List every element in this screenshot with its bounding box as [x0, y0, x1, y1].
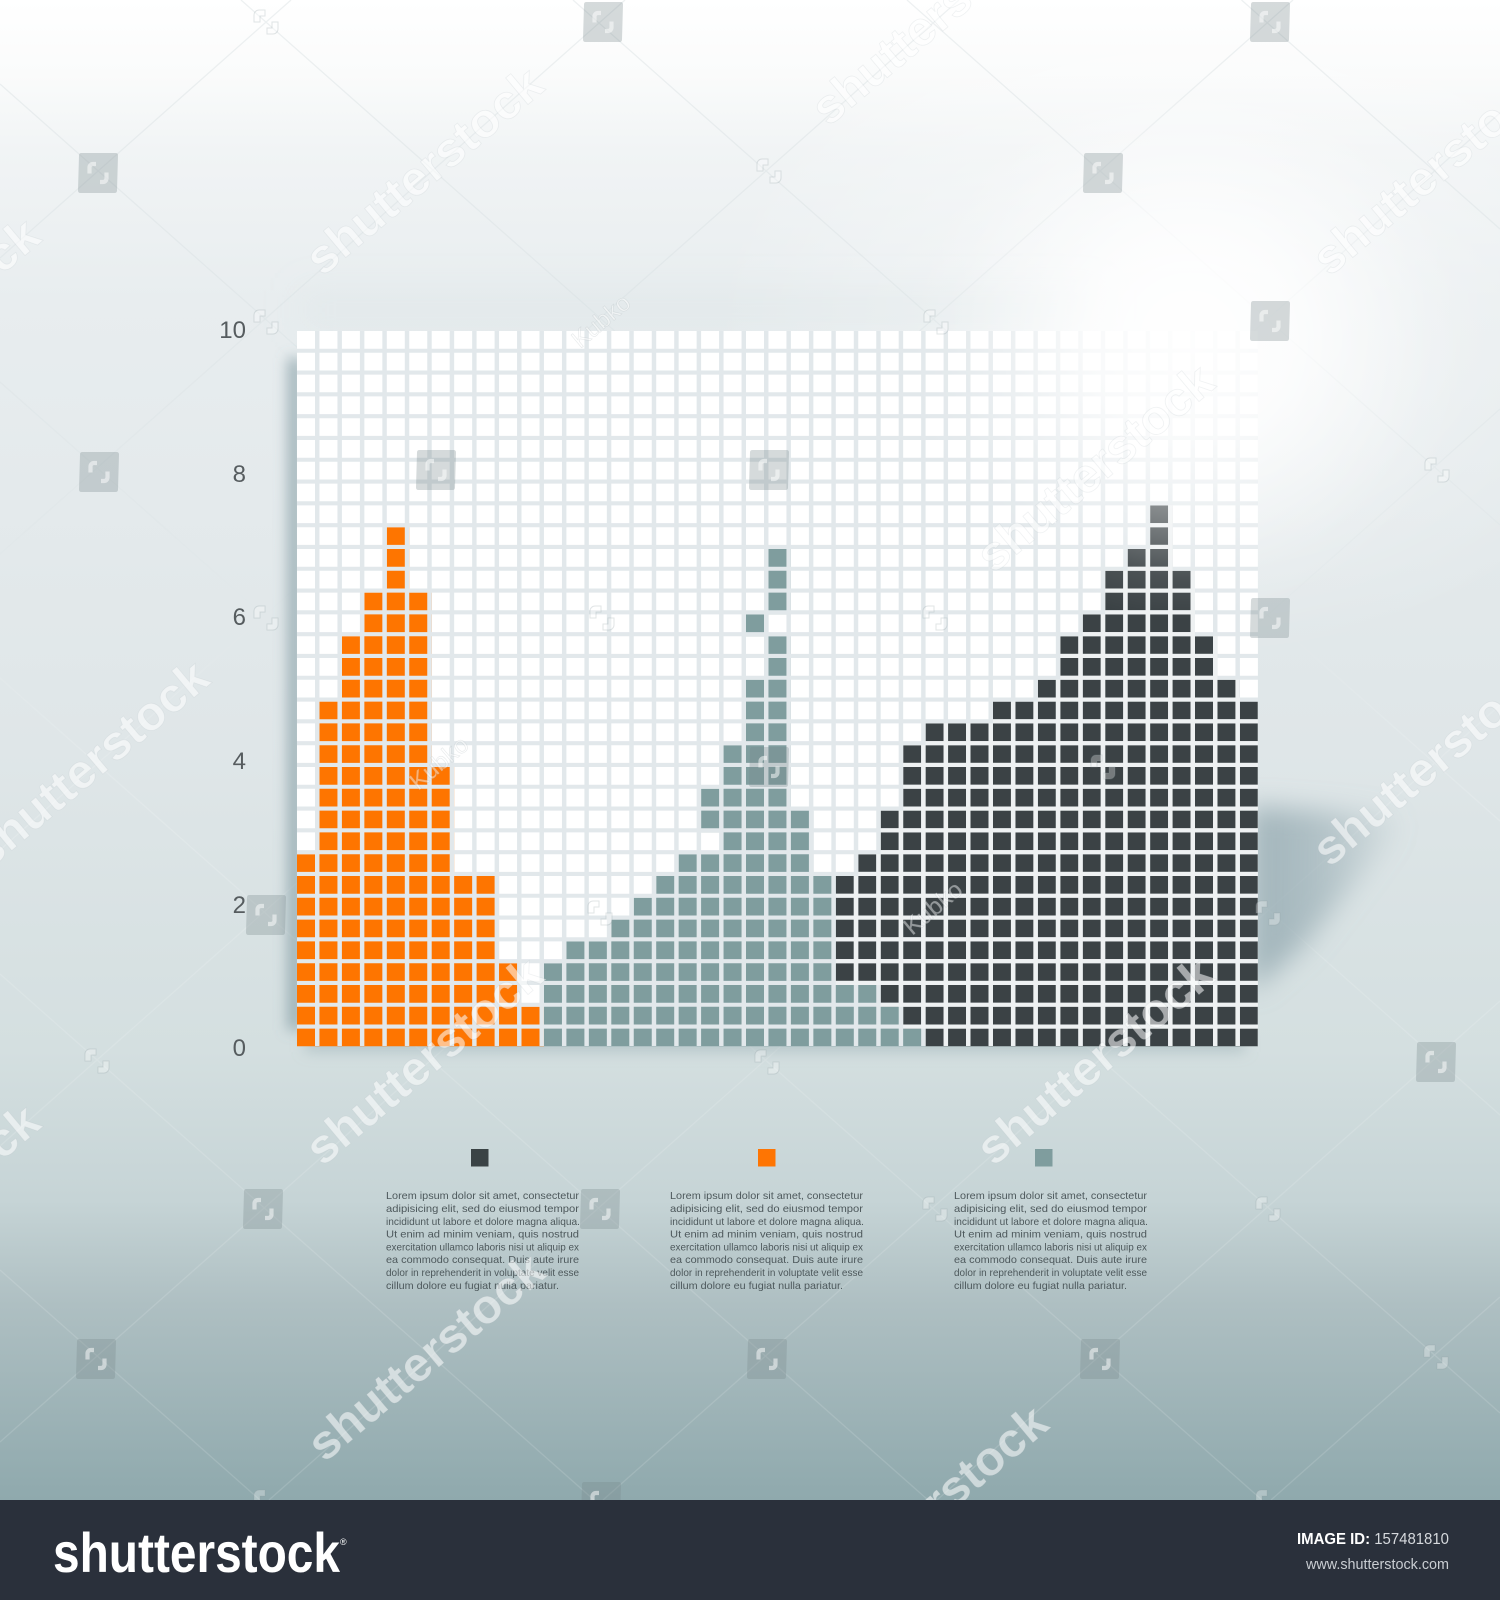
legend item: dark: ea commodo consequat. Duis aute irure: [386, 1254, 579, 1266]
series: grey teal cells: [544, 549, 926, 1046]
watermark: diagonal wordmarks: shutterstock: [966, 354, 1224, 583]
y axis labels: 8: [233, 461, 246, 488]
legend item: teal: ea commodo consequat. Duis aute irure: [954, 1254, 1147, 1266]
legend item: orange: Ut enim ad minim veniam, quis nostrud: [670, 1228, 863, 1240]
watermark: diagonal wordmarks: shutterstock: [295, 947, 553, 1176]
legend item: orange: dolor in reprehenderit in voluptate velit esse: [670, 1267, 863, 1279]
legend item: orange: cillum dolore eu fugiat nulla pariatur.: [670, 1280, 843, 1292]
watermark: author credit: [405, 289, 968, 941]
y axis labels: 2: [233, 892, 246, 919]
footer registered mark: ®: [340, 1537, 347, 1547]
legend item: teal: cillum dolore eu fugiat nulla pariatur.: [954, 1280, 1127, 1292]
y axis labels: 6: [233, 604, 246, 631]
y axis labels: 10: [219, 317, 246, 344]
footer image id: IMAGE ID: 157481810: [1297, 1531, 1449, 1548]
shadow: bottom: [305, 1036, 1245, 1052]
shadow: top haze: [300, 290, 1100, 330]
footer site url: www.shutterstock.com: [1305, 1556, 1449, 1573]
legend item: teal: incididunt ut labore et dolore magna aliqua.: [954, 1216, 1148, 1228]
legend item: dark: exercitation ullamco laboris nisi ut aliquip ex: [386, 1242, 580, 1254]
legend item: teal: Ut enim ad minim veniam, quis nostrud: [954, 1228, 1147, 1240]
legend item: orange: adipisicing elit, sed do eiusmod tempor: [670, 1203, 864, 1215]
chart white cell base: [297, 331, 1258, 1046]
y axis labels: [219, 317, 246, 1062]
y axis labels: 0: [233, 1035, 246, 1062]
watermark: author credit: Kubko: [567, 289, 636, 354]
footer banner: [0, 1500, 1500, 1600]
legend item: orange: incididunt ut labore et dolore magna aliqua.: [670, 1216, 864, 1228]
glow: over chart top right: [905, 60, 1475, 620]
legend item: orange: Lorem ipsum dolor sit amet, consectetur: [670, 1190, 864, 1202]
series: dark cells: [836, 505, 1258, 1046]
legend item: teal: dolor in reprehenderit in voluptate velit esse: [954, 1267, 1147, 1279]
soft shadows behind chart: [288, 290, 1397, 1052]
legend item: orange: [670, 1149, 864, 1292]
chart grid lines: [297, 331, 1258, 1046]
shadow: left: [288, 358, 302, 1030]
watermark: diagonal wordmarks: shutterstock: [295, 57, 553, 286]
watermark: author credit: Kubko: [405, 731, 474, 796]
watermark: author credit: Kubko: [899, 876, 968, 941]
legend item: orange: exercitation ullamco laboris nisi ut aliquip ex: [670, 1242, 864, 1254]
legend item: dark: cillum dolore eu fugiat nulla pariatur.: [386, 1280, 559, 1292]
series: orange cells: [297, 527, 544, 1046]
legend and descriptions: [386, 1149, 1148, 1292]
lighter grid lines around dark cells: [836, 506, 1258, 1046]
glow: top right highlight on background: [710, 0, 1500, 660]
legend item: dark: [386, 1149, 580, 1292]
shadow: right cast: [1250, 806, 1397, 992]
watermark: diagonal wordmarks: shutterstock: [966, 947, 1224, 1176]
legend item: dark: incididunt ut labore et dolore magna aliqua.: [386, 1216, 580, 1228]
legend item: teal: Lorem ipsum dolor sit amet, consectetur: [954, 1190, 1148, 1202]
legend item: teal: exercitation ullamco laboris nisi ut aliquip ex: [954, 1242, 1148, 1254]
legend item: dark: adipisicing elit, sed do eiusmod tempor: [386, 1203, 580, 1215]
legend item: dark: Ut enim ad minim veniam, quis nostrud: [386, 1228, 579, 1240]
legend item: dark: Lorem ipsum dolor sit amet, consectetur: [386, 1190, 580, 1202]
legend item: orange: ea commodo consequat. Duis aute irure: [670, 1254, 863, 1266]
legend item: dark: dolor in reprehenderit in voluptate velit esse: [386, 1267, 579, 1279]
footer logo wordmark: shutterstock: [53, 1521, 341, 1584]
legend item: teal: [954, 1149, 1148, 1292]
y axis labels: 4: [233, 748, 246, 775]
pixel chart: [297, 331, 1258, 1046]
legend item: teal: adipisicing elit, sed do eiusmod tempor: [954, 1203, 1148, 1215]
watermark: diagonal wordmarks: shutterstock: [297, 1243, 555, 1472]
